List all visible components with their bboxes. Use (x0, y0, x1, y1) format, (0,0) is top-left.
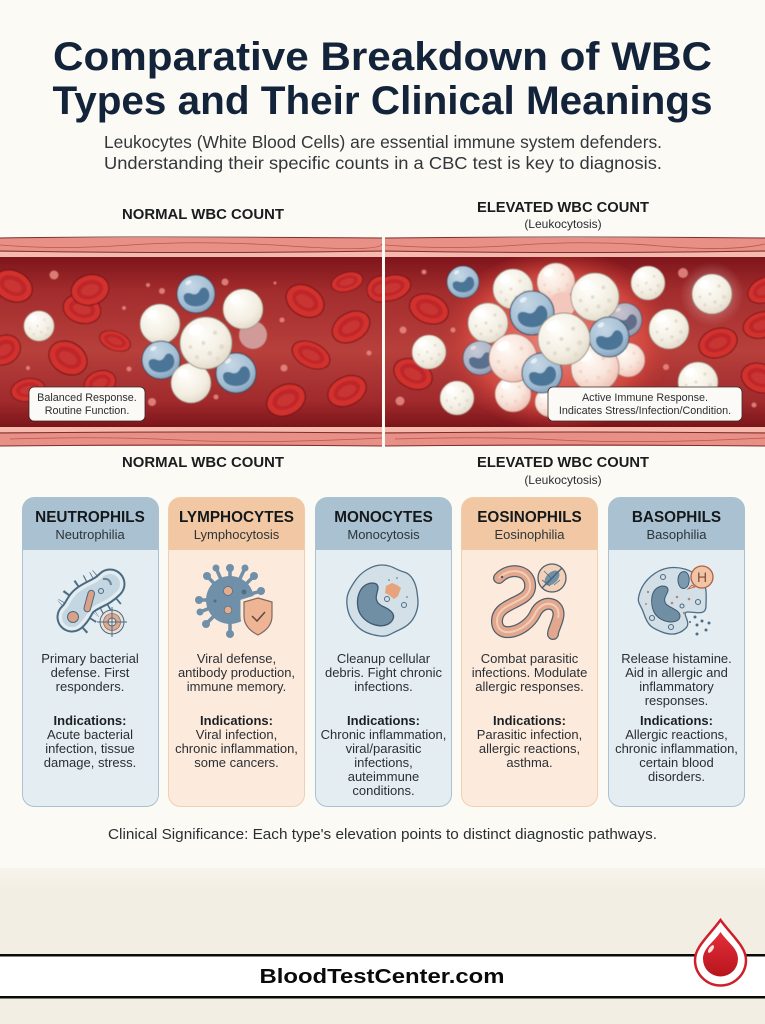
name: LYMPHOCYTES (179, 509, 294, 526)
vessel walls (385, 237, 765, 446)
heading: elevated count top: ELEVATED WBC COUNT (477, 200, 649, 216)
callout: balanced response: Balanced Response. (37, 392, 137, 404)
name: Monocytosis (347, 527, 420, 542)
intro text: Understanding their specific counts in a CBC test is key to diagnosis. (104, 153, 662, 173)
description: asthma. (506, 755, 553, 770)
description: allergic responses. (475, 679, 584, 694)
title: Types and Their Clinical Meanings (52, 79, 712, 123)
name: NEUTROPHILS (35, 509, 145, 526)
description: Release histamine. (621, 651, 732, 666)
description: Indications: (493, 713, 566, 728)
description: defense. First (51, 665, 130, 680)
description: some cancers. (194, 755, 279, 770)
description: infections. Modulate (472, 665, 587, 680)
description: debris. Fight chronic (325, 665, 443, 680)
name: Eosinophilia (494, 527, 565, 542)
description: Indications: (640, 713, 713, 728)
heading: elevated count lower: (Leukocytosis) (524, 473, 602, 487)
callout: balanced response: Routine Function. (45, 405, 129, 417)
description (41, 651, 139, 770)
description: responders. (56, 679, 124, 694)
icon: basophil releasing histamine (638, 566, 713, 636)
description: Indications: (200, 713, 273, 728)
heading: normal count lower: NORMAL WBC COUNT (122, 455, 284, 471)
vessel walls (0, 237, 382, 446)
lumen with cells (0, 257, 399, 427)
heading: normal count top: NORMAL WBC COUNT (122, 207, 284, 223)
name (179, 509, 294, 542)
icon: monocyte cell (347, 565, 418, 636)
callout: active immune response: Indicates Stress/Infection/Condition. (559, 405, 731, 417)
icon: parasitic worm (497, 564, 566, 634)
name: Basophilia (646, 527, 707, 542)
description: chronic inflammation, (175, 741, 298, 756)
panel: normal blood vessel (0, 237, 399, 446)
heading: elevated count top (477, 200, 649, 231)
panel: monocytes (316, 498, 452, 806)
heading: elevated count lower (477, 455, 649, 487)
description: Cleanup cellular (337, 651, 431, 666)
description: Allergic reactions, (625, 727, 728, 742)
description: Indications: (54, 713, 126, 728)
footer band: BloodTestCenter.com (260, 966, 504, 988)
description (472, 651, 587, 770)
name: BASOPHILS (632, 509, 721, 526)
description: Viral defense, (197, 651, 276, 666)
description: viral/parasitic (346, 741, 422, 756)
description: Chronic inflammation, (321, 727, 446, 742)
callout: active immune response: Active Immune Response. (582, 392, 708, 404)
callout: active immune response (548, 387, 742, 421)
description (321, 651, 446, 798)
description: Aid in allergic and (625, 665, 728, 680)
callout: balanced response (29, 387, 145, 421)
description: chronic inflammation, (615, 741, 738, 756)
icon: blood drop logo (695, 920, 746, 986)
name (334, 509, 433, 542)
panel: elevated blood vessel (368, 237, 765, 446)
description: damage, stress. (44, 755, 136, 770)
description: disorders. (648, 769, 705, 784)
description: auteimmune (348, 769, 419, 784)
name (632, 509, 721, 542)
icon: virus with shield (195, 564, 274, 638)
title: Comparative Breakdown of WBC (53, 35, 712, 79)
title (52, 35, 712, 123)
name (477, 509, 582, 542)
intro text (104, 132, 662, 173)
description: allergic reactions, (479, 741, 580, 756)
name: Neutrophilia (55, 527, 125, 542)
description: Viral infection, (196, 727, 277, 742)
icon: bacterium with target (68, 579, 127, 637)
description: infections, (354, 755, 413, 770)
name (35, 509, 145, 542)
description: Parasitic infection, (477, 727, 582, 742)
description: infections. (354, 679, 413, 694)
description: Combat parasitic (481, 651, 579, 666)
description: immune memory. (187, 679, 286, 694)
description (615, 651, 738, 784)
name: EOSINOPHILS (477, 509, 582, 526)
heading: elevated count lower: ELEVATED WBC COUNT (477, 455, 649, 471)
footer band (0, 954, 765, 998)
icon: basophil releasing histamine: H (697, 569, 707, 585)
description: antibody production, (178, 665, 295, 680)
panel: lymphocytes (168, 498, 304, 806)
description: Acute bacterial (47, 727, 133, 742)
description: certain blood (639, 755, 714, 770)
description (175, 651, 298, 770)
description: conditions. (352, 783, 415, 798)
name: Lymphocytosis (194, 527, 280, 542)
intro text: Leukocytes (White Blood Cells) are essential immune system defenders. (104, 132, 662, 152)
description: inflammatory (639, 679, 714, 694)
clinical significance note: Clinical Significance: Each type's elevation points to distinct diagnostic pathways. (108, 827, 657, 843)
description: Indications: (347, 713, 420, 728)
heading: elevated count top: (Leukocytosis) (524, 217, 602, 231)
panel: neutrophils (22, 498, 158, 806)
description: responses. (645, 693, 708, 708)
lumen with leukocyte cluster (385, 257, 765, 427)
panel: basophils (608, 498, 744, 806)
name: MONOCYTES (334, 509, 433, 526)
description: infection, tissue (45, 741, 135, 756)
description: Primary bacterial (41, 651, 139, 666)
panel: eosinophils (462, 498, 598, 806)
